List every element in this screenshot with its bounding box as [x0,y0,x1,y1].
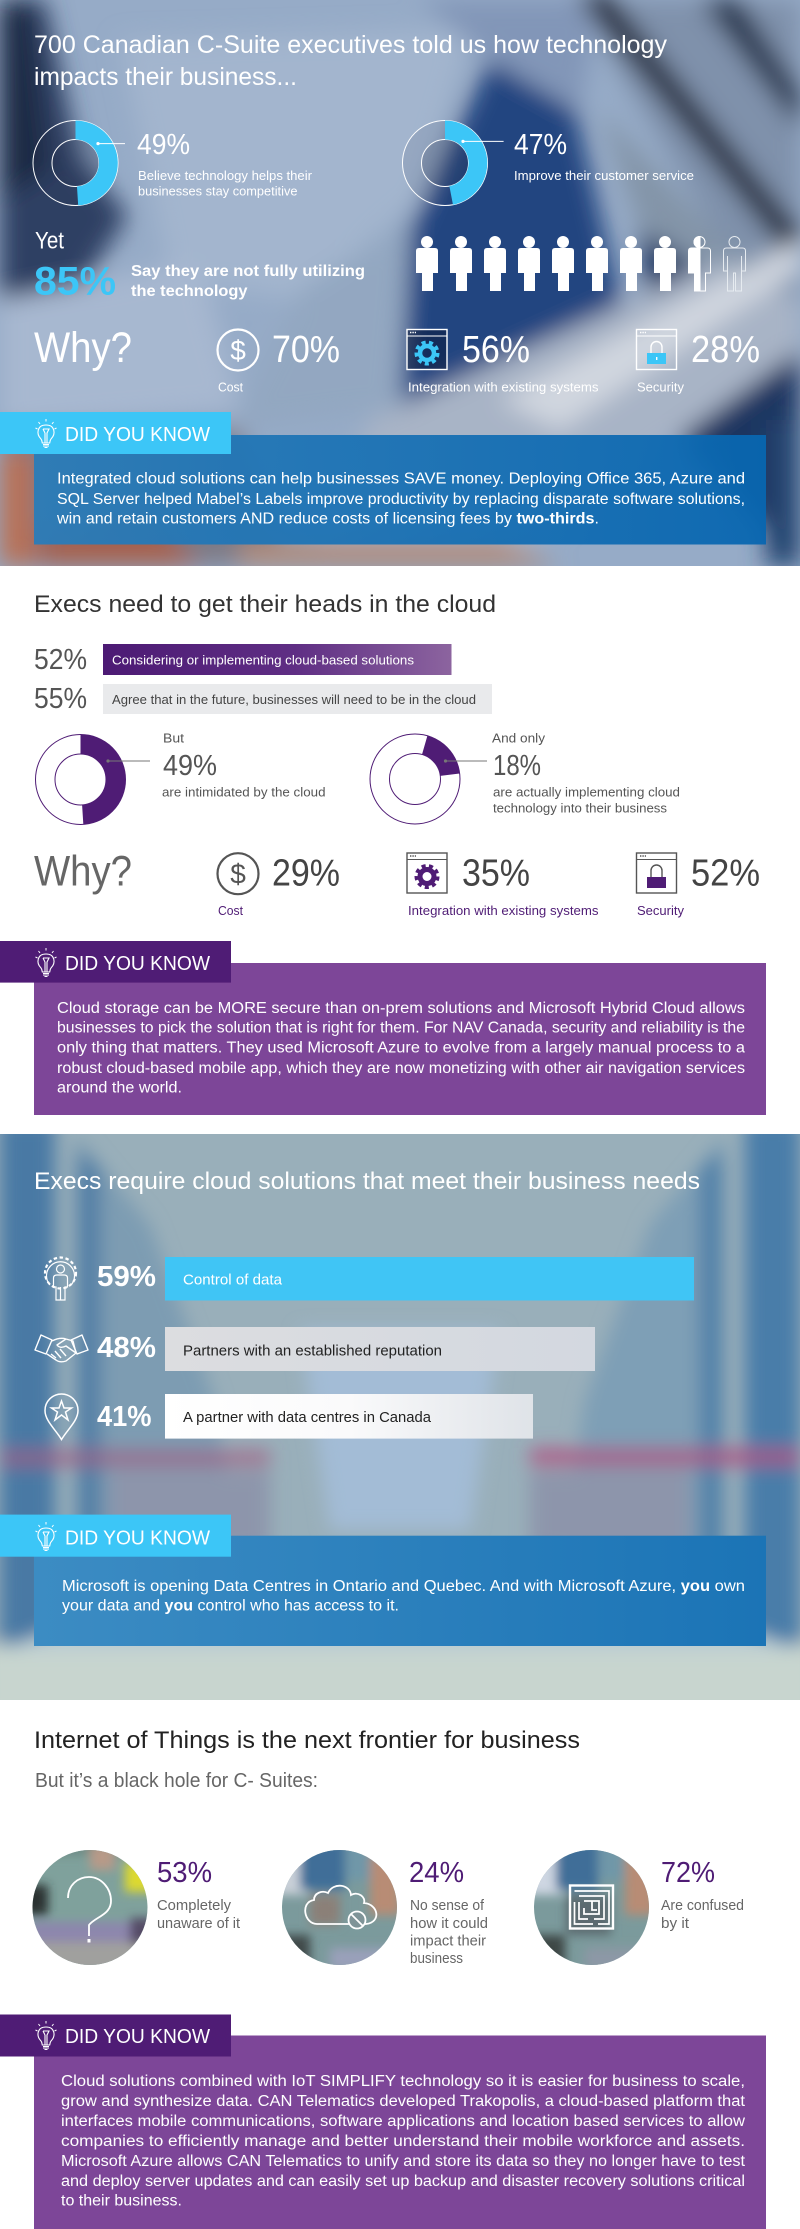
body text: only thing that matters. They used Microsoft Azure to evolve from a largely manual process to a [57,1040,745,1057]
body text: Microsoft Azure allows CAN Telematics to unify and store its data so they no longer have to test [61,2153,746,2170]
reason: integration 35%: 35% [462,852,530,894]
subheading: But it’s a black hole for C- Suites: [35,1770,318,1792]
image circle: question mark [32,1850,148,1965]
did you know tab: DID YOU KNOW [65,1526,211,1549]
stat: 53% unaware: Completely [157,1898,232,1914]
bar row: 59% control of data: Control of data [183,1272,283,1288]
stat: 18% implementing: 18% [493,750,541,782]
did you know tab: DID YOU KNOW [65,423,211,446]
image circle: cloud [282,1850,397,1965]
body text: interfaces mobile communications, software applications and location based services to allow [61,2113,746,2130]
stat: 49% competitive: Believe technology helps their [138,168,313,183]
stat: 49% competitive [137,129,313,199]
stat: yet 85%: Yet [35,228,64,255]
body text: your data and you control who has access to it. [62,1598,399,1615]
stat: 72% confused: by it [661,1916,689,1932]
body text: and deploy server updates and can easily set up backup and disaster recovery solutions critical [61,2173,745,2190]
did you know tab [0,412,231,454]
title: impacts their business... [34,63,297,91]
body text [56,470,745,528]
stat: 53% unaware: 53% [157,1857,212,1889]
did you know tab: DID YOU KNOW [65,2025,211,2048]
reason: security 52% [636,852,760,918]
stat: 72% confused [534,1850,744,1965]
stat: 47% customer service: Improve their customer service [514,168,694,183]
donut chart: 18% implementing [370,734,487,824]
icon: dollar: $ [230,859,246,890]
body text: Microsoft is opening Data Centres in Ontario and Quebec. And with Microsoft Azure, you own [62,1578,745,1595]
bar row: 41% data centres: A partner with data centres in Canada [183,1410,432,1426]
heading: internet of things: Internet of Things is the next frontier for business [34,1727,580,1754]
panel: did you know 4 [0,2014,766,2229]
reason: security 28%: Security [637,380,684,394]
body text: grow and synthesize data. CAN Telematics developed Trakopolis, a cloud-based platform that [61,2093,746,2110]
stat: 47% customer service: 47% [514,129,567,161]
bar row: 48% reputation: Partners with an established reputation [183,1343,442,1359]
why heading: Why? [34,324,132,372]
section background: blurred skyscrapers [0,0,800,566]
reason: integration 56%: 56% [462,329,530,371]
reason: cost 70%: Cost [218,380,243,394]
did you know tab [0,1515,231,1557]
icon: dollar: $ [230,335,246,366]
stat: 18% implementing: And only [492,731,546,746]
reason: integration 35% [407,852,599,918]
icon: lock window [636,853,676,893]
body text: Cloud solutions combined with IoT SIMPLIFY technology so it is easier for business to scale, [61,2073,745,2090]
panel: did you know 3 [0,1515,766,1646]
reason: cost 29%: Cost [218,903,243,918]
bar row: 41% data centres: 41% [97,1401,152,1433]
body text: win and retain customers AND reduce costs of licensing fees by two-thirds. [56,510,599,528]
icon row: people 85 of 100 [416,236,746,291]
icon: lock window [636,330,676,370]
reason: cost 70% [218,329,340,394]
stat: 18% implementing: technology into their business [493,800,667,816]
body text [57,1000,745,1097]
body text: robust cloud-based mobile app, which they are now monetizing with other air navigation services [57,1060,745,1077]
icon: gear person [45,1258,76,1300]
title: 700 Canadian C-Suite executives told us how technology [34,31,667,59]
did you know tab [0,2014,231,2056]
stat: yet 85% [34,228,365,303]
stat: 49% intimidated [162,731,326,800]
bar row: 48% reputation: 48% [97,1332,156,1364]
body text: around the world. [57,1080,182,1097]
bar row: 59% control of data [45,1257,694,1300]
stat: 24% no sense: how it could [410,1916,488,1932]
stat: 24% no sense: 24% [409,1857,464,1889]
donut chart: 47% [402,120,504,206]
stat: 47% customer service [514,129,694,183]
reason: cost 29%: 29% [272,852,340,894]
bar: 52% [34,644,452,676]
stat: yet 85%: Say they are not fully utilizing [131,263,365,280]
bar: 55% [34,683,492,715]
stat: 53% unaware: unaware of it [157,1916,240,1932]
reason: integration 56% [407,329,599,394]
did you know tab: DID YOU KNOW [65,952,211,975]
stat: 18% implementing [492,731,680,816]
stat: 24% no sense: business [410,1951,463,1967]
bar: 52%: 52% [34,644,87,676]
stat: 24% no sense: No sense of [410,1898,485,1914]
body text [62,1578,745,1615]
stat: 49% competitive: businesses stay competitive [138,184,298,199]
body text: companies to efficiently manage and better understand their mobile workforce and assets. [61,2133,745,2150]
icon: handshake [35,1335,88,1362]
body text: to their business. [61,2193,182,2210]
image circle: maze [534,1850,649,1965]
body text [61,2073,746,2210]
stat: 24% no sense [282,1850,487,1965]
body text: Integrated cloud solutions can help businesses SAVE money. Deploying Office 365, Azure and [57,470,745,488]
bar row: 41% data centres [45,1394,533,1440]
stat: 49% intimidated: But [163,731,184,746]
stat: 53% unaware [32,1850,240,1965]
donut chart: 49% [33,120,125,206]
stat: 72% confused: Are confused [661,1898,744,1914]
body text: businesses to pick the solution that is right for them. For NAV Canada, security and reliability is the [57,1019,745,1036]
reason: cost 29% [218,852,340,918]
panel: did you know 1 [0,412,766,544]
reason: cost 70%: 70% [272,329,340,371]
body text: SQL Server helped Mabel’s Labels improve productivity by replacing disparate software solutions, [57,491,745,508]
heading: business needs: Execs require cloud solutions that meet their business needs [34,1168,700,1195]
bar row: 48% reputation [35,1327,595,1371]
heading: heads in the cloud: Execs need to get their heads in the cloud [34,591,496,618]
reason: integration 56%: Integration with existing systems [408,380,599,394]
reason: security 52%: 52% [691,852,760,894]
reason: security 52%: Security [637,903,684,918]
reason: security 28% [636,329,760,394]
section background: blurred data centre [0,1120,800,1720]
reason: security 28%: 28% [691,329,760,371]
bar row: 59% control of data: 59% [97,1261,156,1293]
body text: Cloud storage can be MORE secure than on-prem solutions and Microsoft Hybrid Cloud allows [57,1000,745,1017]
reason: integration 35%: Integration with existing systems [408,903,599,918]
stat: yet 85%: the technology [131,283,248,300]
stat: 49% intimidated: 49% [163,750,217,782]
bar: 55%: Agree that in the future, businesses will need to be in the cloud [112,692,476,707]
bar: 52%: Considering or implementing cloud-based solutions [112,652,414,668]
title [34,31,667,91]
donut chart: 49% intimidated [36,734,150,824]
bar: 55%: 55% [34,683,87,715]
panel: did you know 2 [0,941,766,1115]
icon: gear window [407,330,447,370]
stat: yet 85%: 85% [34,259,116,303]
stat: 72% confused: 72% [661,1857,715,1889]
icon: gear window [407,853,447,893]
stat: 18% implementing: are actually implementing cloud [493,784,680,800]
icon: map pin star [45,1394,78,1440]
did you know tab [0,941,231,983]
why heading: Why? [34,848,132,896]
stat: 49% intimidated: are intimidated by the cloud [162,784,326,800]
stat: 49% competitive: 49% [137,129,190,161]
stat: 24% no sense: impact their [410,1934,486,1950]
